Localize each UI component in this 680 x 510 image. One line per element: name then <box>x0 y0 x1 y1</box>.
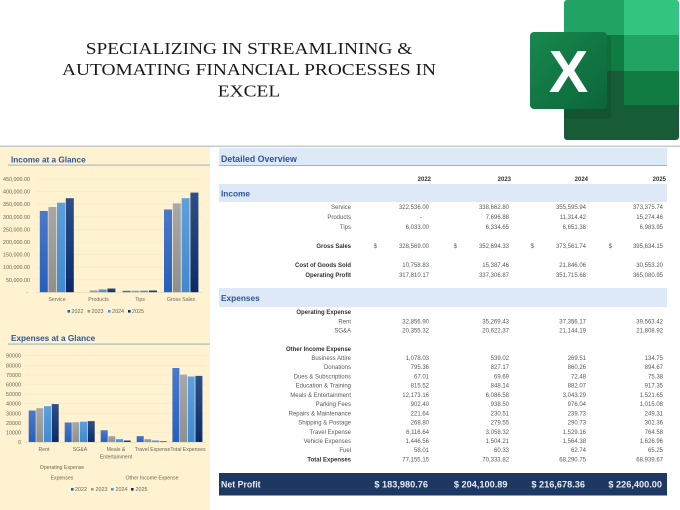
other income expense rows: 894.67 <box>645 365 664 371</box>
other income expense rows: 75.38 <box>648 374 664 380</box>
bar chart: income: 400,000.00 <box>3 190 30 196</box>
bar chart: expenses: Total Expenses <box>170 447 206 453</box>
bar chart: income: 300,000.00 <box>3 215 30 221</box>
legend: expenses chart <box>71 487 148 493</box>
gross sales row: 395,634.15 <box>633 244 664 250</box>
other income expense rows: Shipping & Postage <box>298 421 352 427</box>
other income expense rows <box>286 347 664 454</box>
bar chart: expenses: Rent <box>39 447 50 453</box>
other income expense rows: 976.04 <box>568 402 587 408</box>
bar chart: income: Products <box>88 297 109 303</box>
legend: income chart: 2023 <box>92 309 104 315</box>
income rows: 7,696.88 <box>486 215 510 221</box>
bar chart: income: 450,000.00 <box>3 177 30 183</box>
bar chart: income: 250,000.00 <box>3 227 30 233</box>
income rows: 15,274.46 <box>636 215 664 221</box>
other income expense rows: Meals & Entertainment <box>290 393 351 399</box>
gross sales row: $ <box>609 244 613 250</box>
other income expense rows: 917.35 <box>645 384 664 390</box>
profit rows: 30,553.20 <box>636 263 664 269</box>
year headers: 2024 <box>575 177 589 183</box>
other income expense rows: 239.73 <box>568 411 587 417</box>
bar chart: expenses: 30000 <box>6 411 21 417</box>
other income expense rows: Dues & Subscriptions <box>294 374 351 380</box>
legend: expenses chart: 2024 <box>116 487 128 493</box>
income rows: 11,314.42 <box>560 215 587 221</box>
other income expense rows: 1,521.65 <box>640 393 664 399</box>
profit rows: 21,846.06 <box>559 263 587 269</box>
other income expense rows: 1,504.21 <box>486 439 510 445</box>
other income expense rows: 1,529.16 <box>563 430 587 436</box>
other income expense rows: 848.14 <box>491 384 510 390</box>
income rows: 322,536.00 <box>399 205 430 211</box>
gross sales row: $ <box>374 244 378 250</box>
income rows: 6,334.65 <box>486 225 510 231</box>
bar chart: expenses: Entertainment <box>100 454 133 460</box>
bar chart: expenses: 80000 <box>6 363 21 369</box>
other income expense rows: 279.55 <box>491 421 510 427</box>
income rows: - <box>420 215 422 221</box>
other income expense rows: Other Income Expense <box>286 347 352 353</box>
other income expense rows: 3,058.32 <box>486 430 510 436</box>
profit rows <box>295 263 664 279</box>
bar chart: expenses: 40000 <box>6 402 21 408</box>
other income expense rows: 134.75 <box>645 356 664 362</box>
legend: income chart <box>68 309 144 315</box>
icon: Excel logo: X <box>549 39 588 105</box>
bar chart: expenses: Expenses <box>51 476 74 482</box>
other income expense rows: 62.74 <box>571 448 587 454</box>
profit rows: 365,080.95 <box>633 273 664 279</box>
bar chart: expenses: 20000 <box>6 421 21 427</box>
other income expense rows: 764.58 <box>645 430 664 436</box>
year headers: 2023 <box>498 177 512 183</box>
total expenses row <box>307 458 664 464</box>
legend: income chart: 2025 <box>132 309 144 315</box>
other income expense rows: Repairs & Maintenance <box>289 411 352 417</box>
other income expense rows: 902.40 <box>411 402 430 408</box>
heading: detailed overview: Detailed Overview <box>221 154 297 164</box>
income rows: 338,662.80 <box>479 205 510 211</box>
income rows: Tips <box>340 225 351 231</box>
bar chart: income: - <box>26 290 28 296</box>
other income expense rows: 6,116.64 <box>406 430 430 436</box>
other income expense rows: 3,043.29 <box>563 393 587 399</box>
other income expense rows: Vehicle Expenses <box>304 439 351 445</box>
bar chart: expenses: 90000 <box>6 354 21 360</box>
bar chart: income: Service <box>48 297 66 303</box>
operating expense rows: Operating Expense <box>296 310 352 316</box>
other income expense rows: 72.48 <box>571 374 587 380</box>
other income expense rows: 58.01 <box>414 448 430 454</box>
bar chart: expenses: Meals & <box>107 447 126 453</box>
income rows: Products <box>327 215 351 221</box>
net profit bar: $ 183,980.76 <box>374 480 428 490</box>
total expenses row: Total Expenses <box>307 458 352 464</box>
other income expense rows: 302.36 <box>645 421 664 427</box>
operating expense rows: 37,356.17 <box>559 320 587 326</box>
bar chart: expenses: 0 <box>18 440 21 446</box>
gross sales row: 328,569.00 <box>399 244 430 250</box>
bar chart: income: 50,000.00 <box>6 278 30 284</box>
profit rows: 351,715.68 <box>556 273 587 279</box>
bar chart: expenses: SG&A <box>73 447 88 453</box>
other income expense rows: 249.31 <box>645 411 664 417</box>
total expenses row: 68,290.75 <box>559 458 587 464</box>
net profit bar: $ 216,678.36 <box>531 480 585 490</box>
net profit bar: Net Profit <box>221 480 261 490</box>
other income expense rows: 67.01 <box>414 374 430 380</box>
other income expense rows: 69.69 <box>494 374 510 380</box>
other income expense rows: 60.33 <box>494 448 510 454</box>
divider strip <box>0 146 680 147</box>
bar chart: income: 200,000.00 <box>3 240 30 246</box>
gross sales row: Gross Sales <box>316 244 352 250</box>
other income expense rows: 882.07 <box>568 384 587 390</box>
bar chart: expenses: Other Income Expense <box>125 476 179 482</box>
operating expense rows: 39,563.42 <box>636 320 664 326</box>
other income expense rows: 269.51 <box>568 356 587 362</box>
other income expense rows: Education & Training <box>296 384 351 390</box>
gross sales row <box>316 244 664 250</box>
operating expense rows: 21,144.19 <box>559 328 587 334</box>
bar chart: income <box>3 177 202 303</box>
profit rows: 10,758.83 <box>402 263 430 269</box>
other income expense rows: 290.73 <box>568 421 587 427</box>
section header: expenses: Expenses <box>221 293 260 303</box>
year headers: 2025 <box>653 177 667 183</box>
gross sales row: $ <box>531 244 535 250</box>
legend: expenses chart: 2025 <box>136 487 148 493</box>
operating expense rows: 20,622.37 <box>482 328 510 334</box>
income rows: 373,375.74 <box>633 205 664 211</box>
other income expense rows: 6,086.58 <box>486 393 510 399</box>
other income expense rows: 230.51 <box>491 411 510 417</box>
operating expense rows <box>296 310 664 334</box>
bar chart: income: Tips <box>135 297 145 303</box>
profit rows: 317,810.17 <box>399 273 430 279</box>
other income expense rows: Business Attire <box>311 356 352 362</box>
income rows: 6,983.95 <box>640 225 664 231</box>
net profit bar: $ 204,100.89 <box>454 480 508 490</box>
other income expense rows: 539.02 <box>491 356 510 362</box>
income rows <box>327 205 664 231</box>
legend: expenses chart: 2023 <box>96 487 108 493</box>
other income expense rows: 1,015.08 <box>640 402 664 408</box>
other income expense rows: 221.64 <box>411 411 430 417</box>
operating expense rows: 21,808.92 <box>636 328 664 334</box>
other income expense rows: 815.52 <box>411 384 430 390</box>
profit rows: Cost of Goods Sold <box>295 263 351 269</box>
section header: expenses <box>219 288 667 307</box>
title: SPECIALIZING IN STREAMLINING & <box>86 39 412 58</box>
heading: income at a glance: Income at a Glance <box>11 156 86 164</box>
bar chart: income: Gross Sales <box>167 297 196 303</box>
gross sales row: 352,694.33 <box>479 244 510 250</box>
title <box>62 39 436 100</box>
title: AUTOMATING FINANCIAL PROCESSES IN <box>62 60 436 79</box>
other income expense rows: 1,564.38 <box>563 439 587 445</box>
other income expense rows: 12,173.16 <box>402 393 430 399</box>
bar chart: expenses: 10000 <box>6 430 21 436</box>
year headers <box>418 177 667 183</box>
other income expense rows: 268.80 <box>411 421 430 427</box>
other income expense rows: 1,626.96 <box>640 439 664 445</box>
year headers: 2022 <box>418 177 432 183</box>
bar chart: income: 350,000.00 <box>3 202 30 208</box>
panel: detailed overview table <box>219 148 667 496</box>
gross sales row: $ <box>454 244 458 250</box>
income rows: 6,651.38 <box>563 225 587 231</box>
net profit bar: $ 226,400.00 <box>608 480 662 490</box>
profit rows: Operating Profit <box>305 273 351 279</box>
other income expense rows: Donations <box>324 365 351 371</box>
legend: expenses chart: 2022 <box>75 487 87 493</box>
other income expense rows: 795.36 <box>411 365 430 371</box>
section header: income: Income <box>221 188 250 198</box>
heading: expenses at a glance: Expenses at a Glance <box>11 334 96 343</box>
total expenses row: 77,155.15 <box>402 458 430 464</box>
bar chart: income: 150,000.00 <box>3 253 30 259</box>
income rows: 355,595.94 <box>556 205 587 211</box>
net profit bar <box>219 473 667 496</box>
legend: income chart: 2022 <box>72 309 84 315</box>
bar chart: expenses: 60000 <box>6 382 21 388</box>
bar chart: expenses <box>6 354 206 482</box>
bar chart: expenses: Travel Expense <box>135 447 171 453</box>
title: EXCEL <box>218 82 280 100</box>
operating expense rows: SG&A <box>334 328 351 334</box>
other income expense rows: Fuel <box>339 448 351 454</box>
other income expense rows: 1,078.03 <box>406 356 430 362</box>
operating expense rows: Rent <box>338 320 351 326</box>
panel: charts <box>0 147 210 510</box>
profit rows: 15,387.46 <box>482 263 510 269</box>
total expenses row: 70,333.82 <box>482 458 510 464</box>
legend: income chart: 2024 <box>112 309 124 315</box>
operating expense rows: 32,856.90 <box>402 320 430 326</box>
icon: Excel logo <box>530 0 679 140</box>
other income expense rows: 860.26 <box>568 365 587 371</box>
operating expense rows: 35,269.43 <box>482 320 510 326</box>
other income expense rows: 938.50 <box>491 402 510 408</box>
total expenses row: 68,939.67 <box>636 458 664 464</box>
profit rows: 337,306.87 <box>479 273 510 279</box>
gross sales row: 373,561.74 <box>556 244 587 250</box>
bar chart: expenses: Operating Expense <box>40 465 84 471</box>
other income expense rows: Travel Expense <box>310 430 352 436</box>
heading: detailed overview <box>219 148 667 166</box>
other income expense rows: 1,446.56 <box>406 439 430 445</box>
other income expense rows: 827.17 <box>491 365 510 371</box>
section header: income <box>219 184 667 202</box>
operating expense rows: 20,355.32 <box>402 328 430 334</box>
other income expense rows: 65.25 <box>648 448 664 454</box>
other income expense rows: Parking Fees <box>316 402 351 408</box>
bar chart: expenses: 50000 <box>6 392 21 398</box>
income rows: Service <box>331 205 352 211</box>
bar chart: income: 100,000.00 <box>3 265 30 271</box>
bar chart: expenses: 70000 <box>6 373 21 379</box>
income rows: 6,033.00 <box>406 225 430 231</box>
